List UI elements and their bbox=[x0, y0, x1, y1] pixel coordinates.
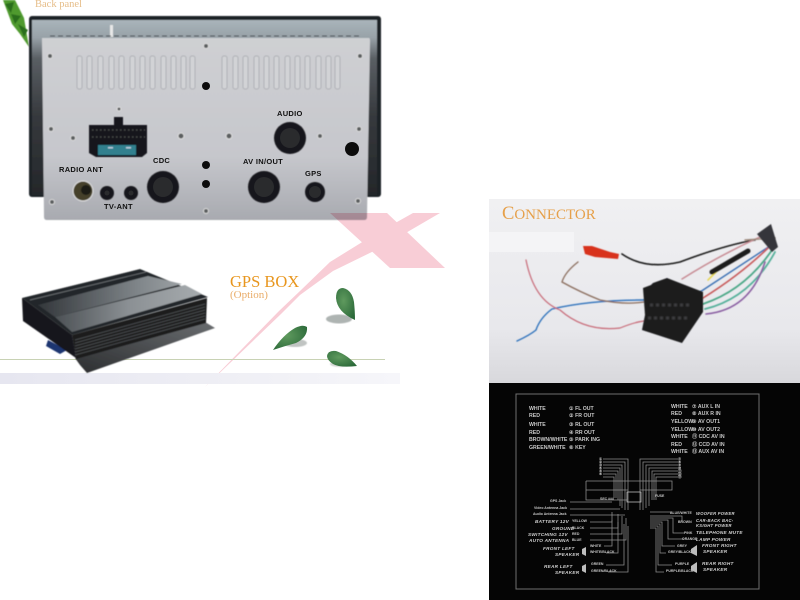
left wire labels: BATTERY 12V bbox=[535, 519, 570, 524]
left wire labels: GROUND bbox=[552, 526, 575, 531]
left wire labels: FRONT LEFT bbox=[543, 546, 576, 551]
top pin labels: ① bbox=[599, 456, 603, 461]
legend: right wires: ⑬ AUX AV IN bbox=[692, 447, 724, 455]
panel: GPS box bbox=[0, 269, 400, 384]
legend: right wires: ⑨ AV OUT1 bbox=[692, 419, 720, 425]
wiring harness bbox=[517, 236, 775, 341]
top pin labels: ④ bbox=[599, 465, 603, 470]
top pin labels: ③ bbox=[599, 462, 603, 467]
wiring connector socket bbox=[89, 117, 147, 157]
legend: right wires: RED bbox=[671, 442, 682, 448]
left wire labels: GREEN bbox=[591, 562, 604, 566]
top pin labels bbox=[599, 456, 682, 479]
right wire labels: KSIGHT POWER bbox=[696, 523, 732, 528]
right wire labels: CAR-BACK BAC- bbox=[696, 518, 734, 523]
top pin labels: ⑦ bbox=[678, 456, 682, 461]
left wire labels: BLUE bbox=[572, 538, 582, 542]
legend: right wires: ⑪ CDC AV IN bbox=[692, 432, 725, 440]
right wire labels: FRONT RIGHT bbox=[702, 543, 738, 548]
legend: right wires: ⑦ AUX L IN bbox=[692, 404, 720, 410]
right wire labels: FUSE bbox=[655, 494, 665, 498]
left wire labels: SPEAKER bbox=[555, 552, 580, 557]
top pin labels: ⑥ bbox=[599, 471, 603, 476]
legend: right wires: ⑩ AV OUT2 bbox=[692, 427, 720, 433]
right wire labels: GREY bbox=[677, 544, 688, 548]
panel: radio back panel bbox=[29, 16, 381, 220]
bezel bbox=[29, 16, 381, 220]
legend: left wires bbox=[529, 406, 600, 451]
red RCA plug bbox=[583, 246, 619, 259]
left wire labels: REAR LEFT bbox=[544, 564, 573, 569]
legend: left wires: RED bbox=[529, 413, 540, 419]
radio antenna socket bbox=[72, 180, 94, 202]
left wire labels: GREEN/BLACK bbox=[591, 569, 617, 573]
right wire labels: ORANGE bbox=[682, 537, 698, 541]
GPS box device bbox=[22, 269, 215, 373]
icon: corner leaves bbox=[3, 0, 29, 47]
legend: left wires: ⑥ KEY bbox=[569, 445, 586, 451]
port labels: GPS bbox=[305, 169, 322, 178]
watermark bbox=[489, 232, 574, 252]
port labels: RADIO ANT bbox=[59, 165, 103, 174]
top pin labels: ⑫ bbox=[678, 471, 682, 476]
right wire labels: BLUE/WHITE bbox=[670, 511, 692, 515]
speaker icons bbox=[582, 545, 697, 573]
left wire labels: SEC ### bbox=[600, 497, 614, 501]
left wire labels: RED bbox=[572, 532, 580, 536]
legend: left wires: ④ RR OUT bbox=[569, 430, 596, 436]
legend: left wires: RED bbox=[529, 430, 540, 436]
right wire labels: WOOFER POWER bbox=[696, 511, 735, 516]
right wire labels: TELEPHONE MUTE bbox=[696, 530, 743, 535]
left wire labels: BLACK bbox=[572, 526, 585, 530]
port labels: AV IN/OUT bbox=[243, 157, 283, 166]
right wire labels: PINK bbox=[684, 531, 693, 535]
holes bbox=[202, 82, 359, 188]
legend: right wires: ⑫ CCD AV IN bbox=[692, 440, 725, 448]
right wire labels: REAR RIGHT bbox=[702, 561, 735, 566]
audio sockets bbox=[100, 122, 325, 203]
floor line bbox=[0, 359, 385, 360]
heading: connector: CONNECTOR bbox=[502, 204, 596, 224]
legend: right wires: WHITE bbox=[671, 404, 688, 410]
legend: right wires: RED bbox=[671, 411, 682, 417]
legend: right wires: YELLOW bbox=[671, 419, 693, 425]
port labels: CDC bbox=[153, 156, 170, 165]
legend: right wires: YELLOW bbox=[671, 427, 693, 433]
left wire labels: AUTO ANTENNA bbox=[528, 538, 570, 543]
left wire labels: WHITE bbox=[590, 544, 602, 548]
right wire labels: GREY/BLACK bbox=[668, 550, 692, 554]
left wire labels: SPEAKER bbox=[555, 570, 580, 575]
legend: left wires: GREEN/WHITE bbox=[529, 445, 566, 451]
legend: left wires: ③ RL OUT bbox=[569, 422, 595, 428]
top pin labels: ⑬ bbox=[678, 474, 682, 479]
port labels: TV-ANT bbox=[104, 202, 133, 211]
panel: connector photo bbox=[489, 199, 800, 383]
left wire labels: Audio Antenna Jack bbox=[533, 512, 567, 516]
legend: right wires bbox=[671, 404, 725, 455]
top pin labels: ⑧ bbox=[678, 459, 682, 464]
vents bbox=[77, 56, 340, 89]
right wire labels: LAMP POWER bbox=[696, 537, 731, 542]
legend: left wires: BROWN/WHITE bbox=[529, 437, 568, 443]
legend: right wires: ⑧ AUX R IN bbox=[692, 411, 721, 417]
panel: wiring diagram bbox=[489, 383, 800, 600]
left wire labels bbox=[528, 497, 617, 575]
legend: left wires: ② FR OUT bbox=[569, 413, 595, 419]
leaves bbox=[273, 288, 357, 367]
right wire labels: BROWN bbox=[678, 520, 692, 524]
legend: left wires: ⑤ PARK ING bbox=[569, 437, 600, 443]
heading: GPS box: GPS BOX bbox=[230, 272, 299, 291]
diagram frame bbox=[516, 394, 759, 589]
right wire labels: PURPLE bbox=[675, 562, 690, 566]
left wire labels: YELLOW bbox=[572, 519, 588, 523]
top pin labels: ⑨ bbox=[678, 462, 682, 467]
left wire labels: GPS Jack bbox=[550, 499, 566, 503]
wiring lines bbox=[570, 459, 684, 572]
left wire labels: Video Antenna Jack bbox=[534, 506, 567, 510]
left wire labels: SWITCHING 12V bbox=[528, 532, 568, 537]
screws bbox=[48, 44, 362, 214]
right wire labels: PURPLE/BLACK bbox=[666, 569, 694, 573]
left wire labels: WHITE/BLACK bbox=[590, 550, 615, 554]
top pin labels: ② bbox=[599, 459, 603, 464]
black plug bbox=[642, 224, 778, 343]
right wire labels: SPEAKER bbox=[703, 567, 728, 572]
floor band bbox=[0, 373, 400, 384]
text: option: (Option) bbox=[230, 289, 268, 301]
right wire labels bbox=[655, 494, 743, 573]
legend: left wires: WHITE bbox=[529, 406, 546, 412]
right wire labels: SPEAKER bbox=[703, 549, 728, 554]
legend: right wires: WHITE bbox=[671, 434, 688, 440]
legend: right wires: WHITE bbox=[671, 449, 688, 455]
top pin labels: ⑤ bbox=[599, 468, 603, 473]
legend: left wires: ① FL OUT bbox=[569, 406, 595, 412]
top pin labels: ⑩ bbox=[678, 465, 682, 470]
port labels bbox=[59, 109, 322, 211]
legend: left wires: WHITE bbox=[529, 422, 546, 428]
top pin labels: ⑪ bbox=[678, 468, 682, 473]
port labels: AUDIO bbox=[277, 109, 303, 118]
logo: pink X swoosh bbox=[205, 213, 445, 387]
